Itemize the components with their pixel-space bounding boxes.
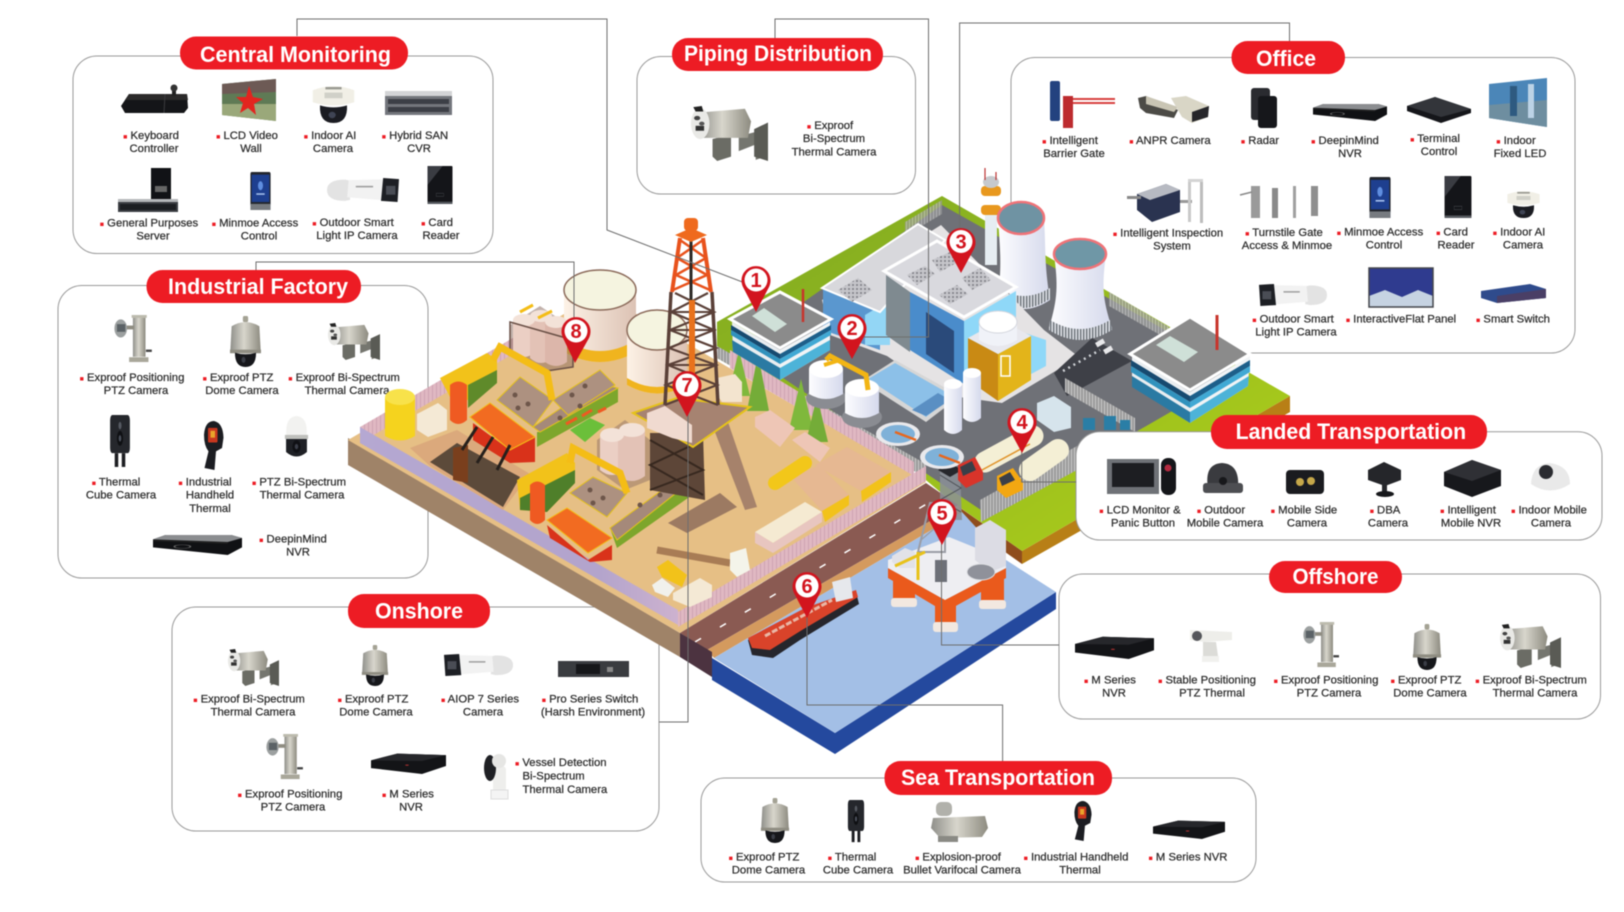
heading: Industrial Factory [146, 270, 361, 303]
heading: Offshore: Offshore [1292, 564, 1378, 589]
item: Intelligent Mobile NVR [1440, 460, 1501, 530]
label: ■ Keyboard [123, 130, 179, 142]
label: Reader [1437, 240, 1475, 252]
icon: handheld thermal [204, 421, 224, 470]
heading: Onshore: Onshore [375, 598, 463, 624]
icon: NVR [1313, 104, 1387, 121]
parking lot [1054, 338, 1135, 432]
label: ■ Hybrid SAN [382, 130, 448, 142]
item: Stable Positioning PTZ Thermal [1158, 630, 1256, 700]
icon: thermal camera [691, 106, 768, 161]
icon: bullet camera [1259, 284, 1327, 306]
panel: Sea Transportation [701, 761, 1256, 882]
label: ■ Indoor [1496, 135, 1536, 147]
label: ■ M Series [382, 788, 434, 800]
item: Intelligent Inspection System [1113, 179, 1223, 252]
label: Dome Camera [205, 385, 279, 397]
tanker trucks [958, 436, 1058, 498]
icon: mobile camera [1203, 463, 1243, 493]
tanker ship [748, 577, 859, 658]
label: Thermal Camera [522, 784, 608, 796]
item: AIOP 7 Series Camera [441, 654, 519, 718]
label: ■ Outdoor Smart [1252, 314, 1334, 326]
label: ■ DBA [1370, 504, 1400, 516]
item: Thermal Cube Camera [86, 415, 157, 502]
label: Light IP Camera [1255, 326, 1337, 338]
office building right [1130, 315, 1250, 423]
icon: indoor mobile dome [1531, 463, 1570, 490]
label: ■ LCD Video [216, 130, 278, 142]
label: ■ Minmoe Access [212, 218, 298, 230]
process unit B [517, 420, 695, 562]
panel: Offshore [1059, 561, 1600, 719]
icon: keyboard [121, 84, 188, 113]
item: Thermal Cube Camera [823, 800, 894, 876]
item: PTZ Bi-Spectrum Thermal Camera [252, 416, 346, 502]
icon: bullet camera [327, 178, 399, 202]
label: ■ Industrial Handheld [1024, 852, 1128, 864]
item: DBA Camera [1368, 462, 1409, 530]
label: Server [136, 230, 170, 242]
label: PTZ Thermal [1179, 688, 1245, 700]
item: Keyboard Controller [121, 84, 188, 155]
label: Thermal Camera [305, 385, 390, 397]
label: ■ Exproof Positioning [238, 788, 342, 800]
heading: Central Monitoring: Central Monitoring [200, 42, 391, 67]
label: ■ Intelligent [1440, 504, 1496, 516]
label: Thermal Camera [260, 490, 345, 502]
label: Camera [1368, 518, 1409, 530]
yellow tank and containers [385, 353, 497, 440]
label: ■ Intelligent [1042, 135, 1098, 147]
map pin 4 [1008, 408, 1036, 453]
item: Exproof PTZ Dome Camera [203, 316, 279, 397]
label: Control [241, 230, 277, 242]
label: Wall [240, 143, 262, 155]
green plant ground [717, 196, 1290, 564]
label: Mobile NVR [1441, 518, 1501, 530]
label: ■ Indoor AI [304, 130, 356, 142]
label: Dome Camera [732, 864, 806, 876]
panel: Central Monitoring [73, 36, 493, 254]
process unit A [462, 347, 618, 470]
item: Exproof PTZ Dome Camera [1391, 624, 1467, 700]
map pin 3: 3 [955, 232, 967, 254]
label: Dome Camera [1393, 688, 1467, 700]
label: ■ Terminal [1410, 133, 1460, 145]
icon: mobile NVR [1444, 460, 1501, 497]
storage tanks [564, 270, 687, 394]
item: Exproof Positioning PTZ Camera [238, 734, 342, 814]
label: Fixed LED [1494, 148, 1546, 160]
label: ■ Outdoor Smart [312, 217, 394, 229]
label: ■ Exproof PTZ [203, 372, 273, 384]
label: ■ InteractiveFlat Panel [1346, 314, 1456, 326]
icon: NVR [1153, 821, 1225, 839]
label: ■ Explosion-proof [915, 852, 1001, 864]
label: ■ Minmoe Access [1337, 226, 1423, 238]
connector: Central Monitoring to site 1 [297, 19, 745, 283]
main plant building [822, 224, 1046, 384]
heading: Landed Transportation [1211, 415, 1487, 449]
office building left [730, 289, 831, 380]
site vehicles and cabins [652, 410, 891, 607]
yellow transformer tower [968, 311, 1031, 401]
panel frame [172, 607, 659, 831]
panel frame [58, 286, 428, 578]
label: Controller [130, 143, 179, 155]
label: ■ Exproof PTZ [729, 852, 799, 864]
item: Card Reader [421, 166, 460, 242]
label: Cube Camera [823, 864, 894, 876]
item: Exproof Bi-Spectrum Thermal Camera [288, 323, 400, 397]
icon: LED wall [1489, 78, 1547, 127]
map pin 8: 8 [570, 321, 582, 343]
concrete plant pad [822, 225, 1079, 403]
label: System [1153, 240, 1191, 252]
icon: thermal camera [328, 323, 380, 360]
icon: storage rack [385, 91, 452, 115]
item: Minmoe Access Control [1337, 177, 1424, 252]
heading: Offshore [1269, 561, 1402, 593]
isometric illustration: oil and gas site [348, 168, 1290, 754]
label: Thermal [189, 503, 231, 515]
icon: video wall [222, 79, 276, 121]
icon: cube camera [110, 415, 130, 467]
map pin 5: 5 [936, 503, 948, 525]
item: Indoor AI Camera [304, 86, 356, 155]
item: Exproof Bi-Spectrum Thermal Camera [691, 106, 877, 161]
item: Indoor Fixed LED [1489, 78, 1547, 160]
icon: stable PTZ [1190, 630, 1232, 662]
label: Bi-Spectrum [803, 133, 865, 145]
icon: positioning camera [1303, 622, 1339, 667]
panel frame [73, 56, 493, 254]
icon: positioning camera [266, 734, 303, 779]
dry dock pit [410, 430, 530, 510]
label: Thermal Camera [1493, 688, 1578, 700]
connector: Offshore to site 5 [942, 530, 1059, 645]
icon: PTZ camera [285, 416, 308, 456]
label: Thermal Camera [792, 146, 877, 158]
panel: Landed Transportation [1022, 415, 1602, 540]
item: DeepinMind NVR [153, 534, 327, 558]
icon: terminal [1407, 97, 1471, 123]
item: Outdoor Smart Light IP Camera [1252, 284, 1337, 338]
label: ■ Thermal [92, 476, 140, 488]
icon: exproof dome [230, 316, 261, 367]
item: Explosion-proof Bullet Varifocal Camera [903, 802, 1022, 876]
icon: exproof dome [761, 798, 789, 843]
label: ■ Smart Switch [1476, 314, 1550, 326]
item: Indoor AI Camera [1493, 191, 1545, 252]
connector: Industrial Factory to site 8 [256, 262, 574, 335]
panel frame [637, 56, 916, 194]
icon: flat panel [1369, 268, 1433, 307]
item: General Purposes Server [100, 168, 199, 242]
label: ■ Indoor AI [1493, 226, 1545, 238]
label: ■ Exproof Positioning [1274, 674, 1378, 686]
item: Exproof Positioning PTZ Camera [80, 315, 184, 397]
label: PTZ Camera [104, 385, 169, 397]
icon: card reader [428, 166, 452, 204]
icon: turnstile gates [1240, 186, 1318, 218]
icon: side camera [1286, 470, 1324, 494]
item: Outdoor Smart Light IP Camera [312, 178, 399, 242]
label: ■ Exproof [807, 120, 853, 132]
icon: access terminal [250, 172, 271, 210]
label: ■ Mobile Side [1271, 504, 1337, 516]
icon: server [118, 168, 178, 212]
item: Exproof PTZ Dome Camera [338, 645, 413, 718]
panel frame [701, 778, 1256, 882]
icon: network switch [558, 661, 629, 677]
icon: radar [1251, 88, 1277, 128]
label: ■ Card [421, 217, 453, 229]
label: NVR [1102, 688, 1126, 700]
item: Mobile Side Camera [1271, 470, 1337, 530]
map pin 6 [792, 572, 821, 618]
label: Bullet Varifocal Camera [903, 864, 1022, 876]
icon: card reader [1445, 176, 1471, 218]
icon: monitor and panic button [1107, 458, 1176, 495]
label: NVR [1338, 148, 1362, 160]
icon: thermal camera [228, 649, 279, 686]
label: ■ Exproof Bi-Spectrum [1475, 674, 1587, 686]
label: NVR [286, 546, 310, 558]
icon: vessel camera [484, 754, 508, 799]
trees and small plant tanks [728, 350, 981, 469]
label: NVR [399, 802, 423, 814]
item: Outdoor Mobile Camera [1187, 463, 1264, 530]
map pin 7 [672, 371, 702, 417]
item: Smart Switch [1476, 284, 1550, 326]
label: ■ Outdoor [1197, 504, 1245, 516]
label: Thermal Camera [211, 706, 296, 718]
icon: explosion-proof camera [931, 802, 988, 842]
label: ■ AIOP 7 Series [441, 694, 519, 706]
icon: exproof dome [362, 645, 388, 686]
item: LCD Monitor & Panic Button [1099, 458, 1181, 530]
map pin 1 [741, 266, 770, 312]
item: Card Reader [1436, 176, 1475, 252]
road [680, 483, 962, 677]
label: Access & Minmoe [1242, 240, 1332, 252]
connector: Sea Transportation to site 6 [807, 595, 1003, 761]
label: ■ Exproof Bi-Spectrum [288, 372, 400, 384]
label: ■ Radar [1241, 135, 1279, 147]
sea block [712, 512, 1056, 754]
label: Bi-Spectrum [522, 770, 585, 782]
label: Cube Camera [86, 490, 157, 502]
label: ■ M Series [1084, 674, 1136, 686]
icon: handheld thermal [1074, 801, 1092, 841]
label: ■ Exproof Positioning [80, 372, 184, 384]
label: ■ Exproof Bi-Spectrum [193, 694, 305, 706]
item: M Series NVR [1149, 821, 1227, 864]
label: ■ Stable Positioning [1158, 674, 1256, 686]
icon: bullet camera [444, 654, 513, 676]
label: Control [1421, 146, 1457, 158]
panel frame [1011, 58, 1575, 353]
icon: exproof dome [1413, 624, 1441, 670]
icon: access terminal [1369, 177, 1391, 218]
connector: Onshore to site 7 [659, 400, 688, 722]
label: Camera [1287, 518, 1328, 530]
equipment boxes [1037, 396, 1130, 432]
item: Exproof Positioning PTZ Camera [1274, 622, 1378, 700]
icon: inspection system [1127, 179, 1203, 223]
label: ■ ANPR Camera [1129, 135, 1211, 147]
item: InteractiveFlat Panel [1346, 268, 1456, 326]
item: Radar [1241, 88, 1279, 147]
item: Indoor Mobile Camera [1511, 463, 1587, 530]
panel: Office [1011, 41, 1575, 353]
offshore platform [888, 503, 1006, 632]
item: Vessel Detection Bi-Spectrum Thermal Camera [484, 754, 608, 799]
label: ■ Turnstile Gate [1245, 227, 1323, 239]
cooling tower front [1049, 239, 1112, 340]
panel: Piping Distribution [637, 38, 916, 194]
heading: Office: Office [1256, 46, 1316, 71]
label: ■ LCD Monitor & [1099, 504, 1181, 516]
label: Reader [422, 230, 460, 242]
icon: network switch [1481, 284, 1546, 303]
label: Barrier Gate [1043, 148, 1105, 160]
icon: ANPR camera [1138, 96, 1209, 123]
icon: DBA camera [1368, 462, 1401, 497]
label: Camera [1503, 240, 1544, 252]
label: Dome Camera [339, 706, 413, 718]
cooling tower rear and communication tower [981, 168, 1051, 309]
icon: NVR [153, 535, 242, 555]
water pool [862, 360, 960, 422]
label: ■ PTZ Bi-Spectrum [252, 476, 346, 488]
label: ■ Exproof PTZ [338, 694, 408, 706]
item: Terminal Control [1407, 97, 1471, 158]
map pin 7: 7 [681, 375, 693, 397]
map pin 4: 4 [1016, 412, 1028, 434]
label: ■ Pro Series Switch [542, 694, 638, 706]
item: M Series NVR [1075, 637, 1154, 700]
label: Camera [1531, 518, 1572, 530]
label: ■ Indoor Mobile [1511, 504, 1587, 516]
label: ■ DeepinMind [1311, 135, 1379, 147]
label: ■ M Series NVR [1149, 852, 1227, 864]
item: Exproof PTZ Dome Camera [729, 798, 806, 876]
panel frame [1059, 574, 1600, 719]
label: ■ DeepinMind [259, 534, 327, 546]
item: Exproof Bi-Spectrum Thermal Camera [193, 649, 305, 718]
label: Camera [463, 706, 504, 718]
sand industrial ground [348, 293, 926, 657]
label: ■ Card [1436, 226, 1468, 238]
label: Handheld [186, 490, 234, 502]
panel frame [1076, 432, 1602, 540]
heading: Office [1232, 41, 1345, 74]
heading: Sea Transportation: Sea Transportation [901, 765, 1095, 790]
label: ■ Thermal [828, 852, 876, 864]
icon: cube camera [848, 800, 864, 842]
icon: dome camera [1507, 191, 1540, 218]
item: Intelligent Barrier Gate [1042, 81, 1115, 160]
connector: Landed Transportation to site 4 [1022, 445, 1076, 482]
map pin 8 [562, 317, 590, 363]
item: Minmoe Access Control [212, 172, 299, 242]
heading: Sea Transportation [884, 761, 1112, 795]
icon: thermal camera [1500, 624, 1561, 668]
icon: barrier gate [1050, 81, 1115, 128]
label: PTZ Camera [1297, 688, 1362, 700]
icon: positioning camera [114, 315, 152, 362]
icon: NVR [371, 754, 446, 774]
label: Mobile Camera [1187, 518, 1264, 530]
map pin 1: 1 [750, 270, 762, 292]
label: Camera [313, 143, 354, 155]
item: Turnstile Gate Access & Minmoe [1240, 186, 1332, 252]
item: Industrial Handheld Thermal [1024, 801, 1128, 876]
label: Panic Button [1111, 518, 1175, 530]
process unit rear [510, 305, 573, 372]
heading: Piping Distribution: Piping Distribution [684, 41, 872, 66]
map pin 2: 2 [846, 318, 858, 340]
heading: Onshore [348, 594, 490, 628]
item: M Series NVR [371, 754, 446, 814]
map pin 3 [946, 228, 976, 273]
panel: Industrial Factory [58, 270, 428, 578]
label: PTZ Camera [261, 802, 326, 814]
item: Exproof Bi-Spectrum Thermal Camera [1475, 624, 1587, 700]
icon: dome camera [313, 86, 354, 123]
label: Control [1366, 240, 1402, 252]
item: Industrial Handheld Thermal [178, 421, 234, 515]
label: ■ Vessel Detection [515, 757, 607, 769]
label: ■ Intelligent Inspection [1113, 228, 1223, 240]
label: (Harsh Environment) [541, 706, 645, 718]
connector: Piping Distribution to site 2 [775, 19, 928, 337]
map pin 2 [837, 314, 866, 359]
panel: Onshore [172, 594, 659, 831]
item: ANPR Camera [1129, 96, 1211, 147]
label: CVR [407, 143, 431, 155]
heading: Industrial Factory: Industrial Factory [168, 274, 349, 299]
drilling rig [633, 218, 757, 510]
label: Thermal [1059, 864, 1101, 876]
item: LCD Video Wall [216, 79, 278, 155]
label: Light IP Camera [316, 230, 398, 242]
heading: Central Monitoring [180, 36, 408, 70]
lattice tower by the road [938, 463, 962, 520]
connector: Office to site 3 [960, 23, 1290, 232]
item: Pro Series Switch (Harsh Environment) [541, 661, 645, 718]
map pin 6: 6 [801, 576, 813, 598]
map pin 5 [928, 499, 956, 545]
item: DeepinMind NVR [1311, 104, 1387, 160]
label: ■ Industrial [178, 476, 232, 488]
item: Hybrid SAN CVR [382, 91, 452, 155]
heading: Landed Transportation: Landed Transportation [1236, 419, 1466, 444]
label: ■ General Purposes [100, 218, 198, 230]
icon: NVR [1075, 637, 1154, 659]
label: ■ Exproof PTZ [1391, 674, 1461, 686]
